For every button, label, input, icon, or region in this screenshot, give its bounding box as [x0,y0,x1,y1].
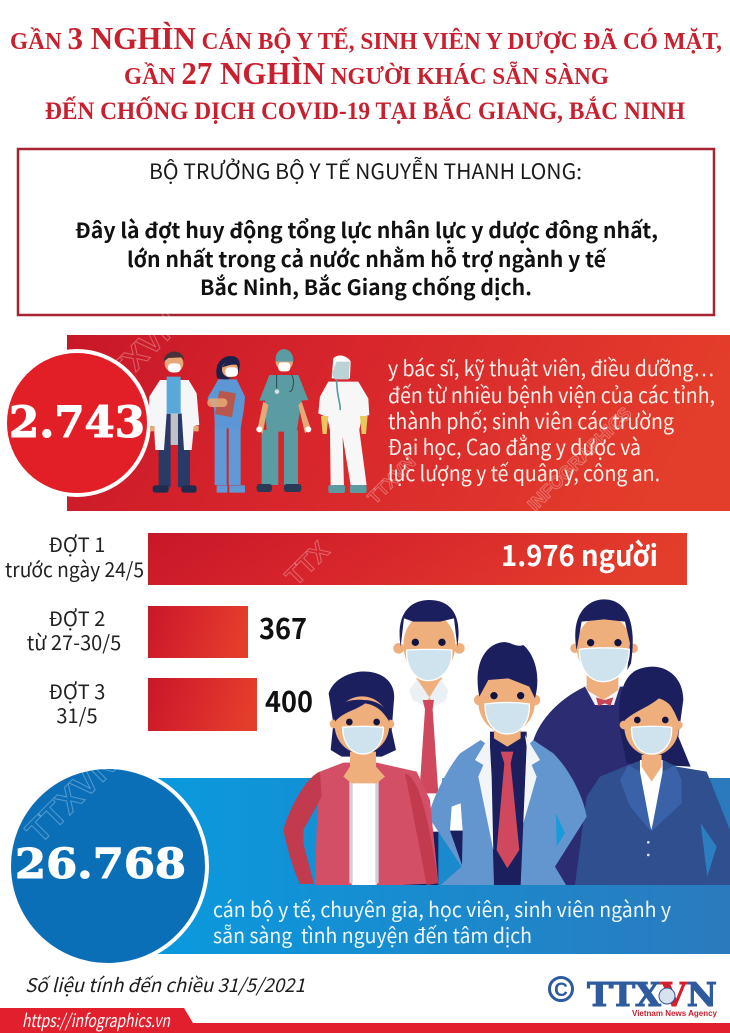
illustration: four medical workers [149,349,369,493]
phase 2 [27,603,307,658]
woman left [283,672,438,885]
watermark: INFOGRAPHICS [524,403,635,515]
minister name: BỘ TRƯỞNG BỘ Y TẾ NGUYỄN THANH LONG: [149,156,582,186]
man back right [532,599,638,885]
bar chart: three phases [5,529,687,731]
description text [388,352,715,488]
logo: TTXVN: Vietnam News Agency [632,1008,717,1018]
phase 1: ĐỢT 1 [49,529,105,558]
phase 3 [49,676,313,731]
description text: sẵn sàng tình nguyện đến tâm dịch [213,919,532,949]
quote text: lớn nhất trong cả nước nhằm hỗ trợ ngành y tế [127,244,607,274]
watermark: TTXVN [87,305,187,405]
description text: thành phố; sinh viên các trường [388,405,674,436]
doctor [149,351,199,493]
title: GẦN 3 NGHÌN CÁN BỘ Y TẾ, SINH VIÊN Y DƯỢC ĐÃ CÓ MẶT, [10,20,722,56]
description text [213,893,671,949]
title: GẦN 27 NGHÌN NGƯỜI KHÁC SẴN SÀNG [124,55,609,91]
illustration: five people in masks [283,599,730,885]
phase 3: 31/5 [56,700,98,729]
description text: cán bộ y tế, chuyên gia, học viên, sinh viên ngành y [213,893,671,923]
phase 1: trước ngày 24/5 [5,554,144,583]
man back left [393,600,465,885]
circle: 26.768: TTXVN [19,745,124,851]
circle: 2.743: 2.743 [9,398,145,448]
source note: Số liệu tính đến chiều 31/5/2021 [25,971,305,998]
woman right [575,667,730,885]
quote text: Bắc Ninh, Bắc Giang chống dịch. [200,272,532,302]
logo: TTXVN: C [554,980,568,1001]
nurse [207,356,245,493]
logo: TTXVN: TTXVN [587,975,717,1014]
footer bar [0,1007,730,1033]
footer bar: https://infographics.vn [22,1007,171,1033]
panel: minister quote [18,149,714,315]
panel: 26.768 volunteers [9,745,730,965]
phase 2: 367 [259,606,307,648]
man center [428,642,587,885]
circle: 2.743 [5,351,149,495]
protective suit worker [318,355,369,493]
phase 1: 1.976 người [501,533,658,575]
phase 3: ĐỢT 3 [49,676,105,705]
description text: lực lượng y tế quân y, công an. [388,457,660,488]
title [10,20,722,125]
phase 1 [5,529,687,591]
surgeon [256,349,311,492]
circle: 26.768 [9,745,207,965]
phase 1: TTX [279,535,335,591]
title: ĐẾN CHỐNG DỊCH COVID-19 TẠI BẮC GIANG, BẮC NINH [45,96,686,125]
phase 2: ĐỢT 2 [49,603,105,632]
circle: 26.768: 26.768 [15,840,186,888]
watermark: TTXVN [364,452,420,508]
description text: Đại học, Cao đẳng y dược và [388,431,641,462]
quote text [75,215,658,302]
watermark [87,305,635,515]
phase 3: 400 [265,679,313,721]
panel: 2.743 medical staff [5,305,730,515]
phase 2: từ 27-30/5 [27,627,121,656]
quote text: Đây là đợt huy động tổng lực nhân lực y dược đông nhất, [75,215,658,245]
